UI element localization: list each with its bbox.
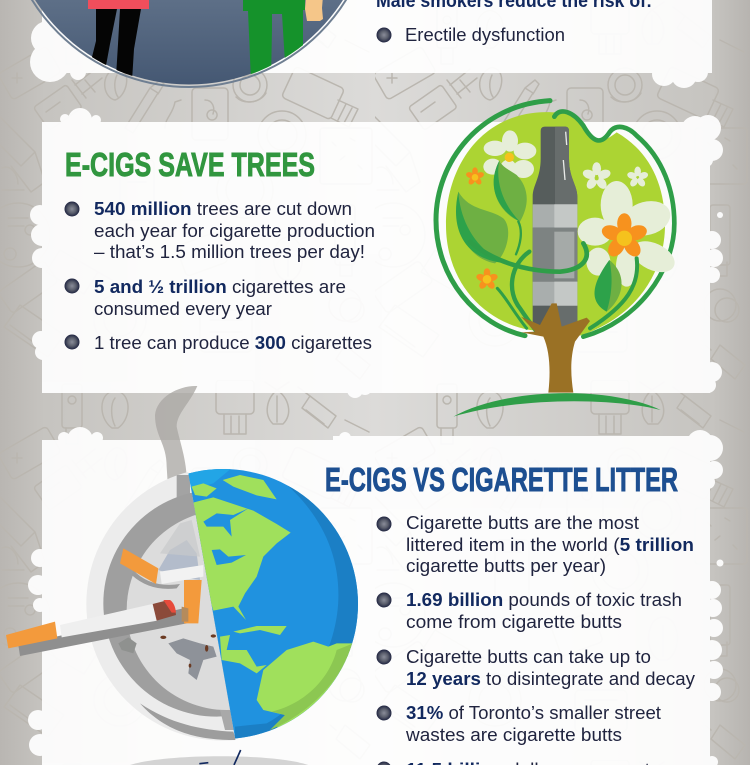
panel: e-cigs vs cigarette litter	[28, 427, 724, 765]
panel: e-cigs save trees	[30, 108, 723, 398]
list: tree facts: 540 million trees are cut down	[94, 199, 352, 219]
heading: e-cigs save trees: E-CIGS SAVE TREES	[65, 146, 315, 183]
tree canopy	[446, 112, 665, 336]
list: litter facts: Cigarette butts can take up to	[406, 647, 651, 667]
left figure: red coat and black trousers	[88, 0, 149, 81]
canopy outline	[436, 101, 674, 337]
orange flowers	[465, 167, 649, 290]
ash	[168, 638, 217, 680]
smoke	[155, 386, 197, 493]
list: litter facts	[376, 513, 695, 765]
list: litter facts: come from cigarette butts	[406, 612, 622, 632]
right figure: green clothes	[243, 0, 305, 81]
list: litter facts: 31% of Toronto’s smaller street	[406, 703, 661, 723]
list: litter facts: Cigarette butts are the most	[406, 513, 639, 533]
vape cartridge	[533, 127, 577, 328]
bullet: erectile dysfunction	[376, 28, 392, 42]
list: litter facts: cigarette butts per year)	[406, 556, 606, 576]
list: tree facts	[64, 199, 375, 353]
south america	[257, 642, 357, 733]
text: erectile dysfunction: Erectile dysfunction	[405, 25, 565, 45]
pen stroke below globe	[199, 750, 241, 765]
north america	[190, 497, 291, 620]
list: tree facts: 1 tree can produce 300 cigarettes	[94, 333, 372, 353]
right figure hand	[305, 0, 323, 21]
illustration: ashtray and globe	[6, 386, 367, 765]
table shadow below globe	[130, 756, 308, 765]
ashtray half	[86, 472, 236, 740]
globe half	[188, 469, 358, 738]
panel: erectile dysfunction (top)	[30, 0, 712, 88]
list: litter facts: littered item in the world ( 5 trillion	[406, 535, 694, 555]
list: litter facts: 1.69 billion pounds of toxic trash	[406, 590, 682, 610]
white flowers	[483, 130, 680, 287]
illustration: vape tree	[436, 101, 680, 417]
greenland	[223, 475, 277, 499]
illustration: people in circle	[31, 0, 347, 88]
list: tree facts: consumed every year	[94, 299, 272, 319]
vine	[470, 222, 637, 332]
list: litter facts: 12 years to disintegrate and decay	[406, 669, 695, 689]
trunk and branches	[521, 303, 590, 393]
list: tree facts: – that’s 1.5 million trees per day!	[94, 242, 365, 262]
list: tree facts: 5 and ½ trillion cigarettes are	[94, 277, 346, 297]
cigarettes	[6, 548, 203, 656]
list: litter facts: wastes are cigarette butts	[405, 725, 622, 745]
leaves	[457, 192, 508, 263]
list: tree facts: each year for cigarette production	[94, 221, 375, 241]
ground	[453, 393, 661, 417]
central america and caribbean	[220, 635, 267, 673]
